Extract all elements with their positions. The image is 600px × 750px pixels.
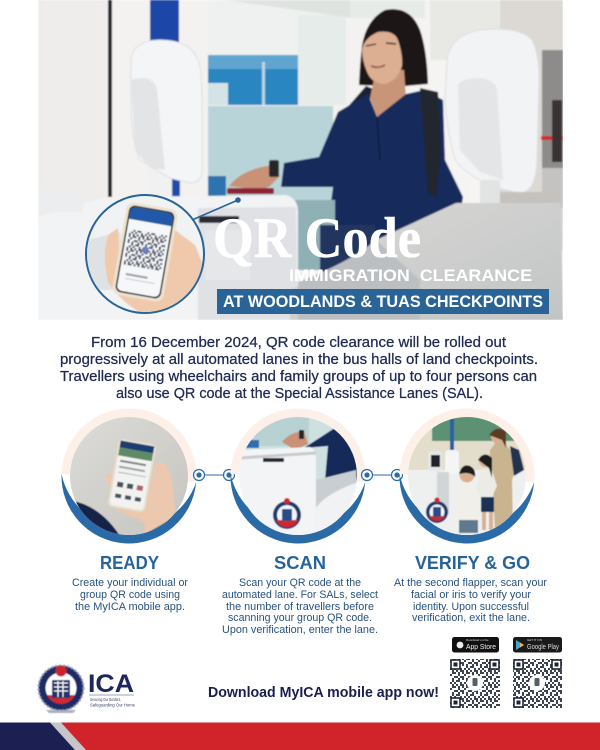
boy <box>456 484 479 520</box>
Google Play badge: GET IT ON <box>527 638 542 642</box>
intro text block: From 16 December 2024, QR code clearance will be rolled out <box>91 335 506 351</box>
step 1 description: the MyICA mobile app. <box>75 601 185 613</box>
step 2 circle: scan photo <box>230 408 365 543</box>
step 3 description: identity. Upon successful <box>413 601 529 613</box>
App Store badge <box>452 637 499 652</box>
QR code: App Store <box>450 659 500 708</box>
step heading: verify and go: VERIFY & GO <box>415 553 530 573</box>
tagline: Securing Our Borders, <box>90 697 121 702</box>
connector between step 2 and step 3 <box>362 470 402 480</box>
hair <box>359 9 428 86</box>
girl <box>477 468 498 497</box>
Google Play badge <box>513 637 562 652</box>
step heading: scan: SCAN <box>274 553 326 573</box>
scanner left <box>159 177 174 198</box>
intro text block <box>60 335 538 402</box>
ICA logo <box>38 666 135 713</box>
step 3 description: verification, exit the lane. <box>412 612 530 624</box>
ICA floor emblem <box>273 498 301 529</box>
tagline: Safeguarding Our Home <box>90 702 135 708</box>
step heading: ready: READY <box>100 553 159 573</box>
neck & face <box>370 70 406 117</box>
step 2 description: the number of travellers before <box>226 601 374 613</box>
tagline <box>90 697 135 708</box>
subtitle: immigration clearance: IMMIGRATION CLEARANCE <box>289 267 532 285</box>
step 2 description: Scan your QR code at the <box>239 577 361 589</box>
intro text block: progressively at all automated lanes in the bus halls of land checkpoints. <box>60 352 538 368</box>
bottom colour band <box>0 722 600 750</box>
ICA floor emblem <box>426 497 448 523</box>
banner: at Woodlands and Tuas checkpoints: AT WOODLANDS & TUAS CHECKPOINTS <box>223 292 543 311</box>
intro text block: Travellers using wheelchairs and family groups of up to four persons can <box>60 369 537 385</box>
intro text block: also use QR code at the Special Assistance Lanes (SAL). <box>116 386 483 402</box>
callout line from gate scanner to phone inset <box>192 197 241 220</box>
wordmark: ICA <box>88 670 134 698</box>
connector between step 1 and step 2 <box>194 470 234 480</box>
step 1 description: group QR code using <box>80 589 180 601</box>
mother <box>490 440 514 528</box>
hero photo: woman scanning QR code at automated gate <box>38 0 563 320</box>
step 2 description <box>222 577 378 636</box>
App Store badge: Download on the <box>466 638 489 642</box>
phone inset circle <box>86 195 205 316</box>
scanner right <box>445 29 539 193</box>
QR code: Google Play <box>513 659 562 708</box>
step 3 description <box>394 577 547 624</box>
shirt <box>281 90 463 240</box>
step 2 description: scanning your group QR code. <box>228 612 372 624</box>
step 3 description: facial or iris to verify your <box>411 589 531 601</box>
step 1 circle: ready photo <box>61 408 196 543</box>
title: QR Code: QR Code <box>213 207 421 270</box>
step 3 description: At the second flapper, scan your <box>394 577 547 589</box>
App Store badge: App Store <box>466 642 496 651</box>
Google Play badge: Google Play <box>527 644 559 651</box>
woman back straps <box>349 85 373 106</box>
behind gate <box>295 200 335 270</box>
hand, watch, passport <box>229 165 280 190</box>
right gate <box>290 203 563 320</box>
left gate <box>38 195 298 320</box>
step 2 description: automated lane. For SALs, select <box>222 589 378 601</box>
step 2 description: Upon verification, enter the lane. <box>222 624 378 636</box>
step 1 description <box>72 577 188 613</box>
step 1 description: Create your individual or <box>72 577 188 589</box>
download call to action: Download MyICA mobile app now! <box>208 685 439 701</box>
emblem <box>38 666 84 713</box>
step 3 circle: verify and go photo <box>399 408 534 543</box>
